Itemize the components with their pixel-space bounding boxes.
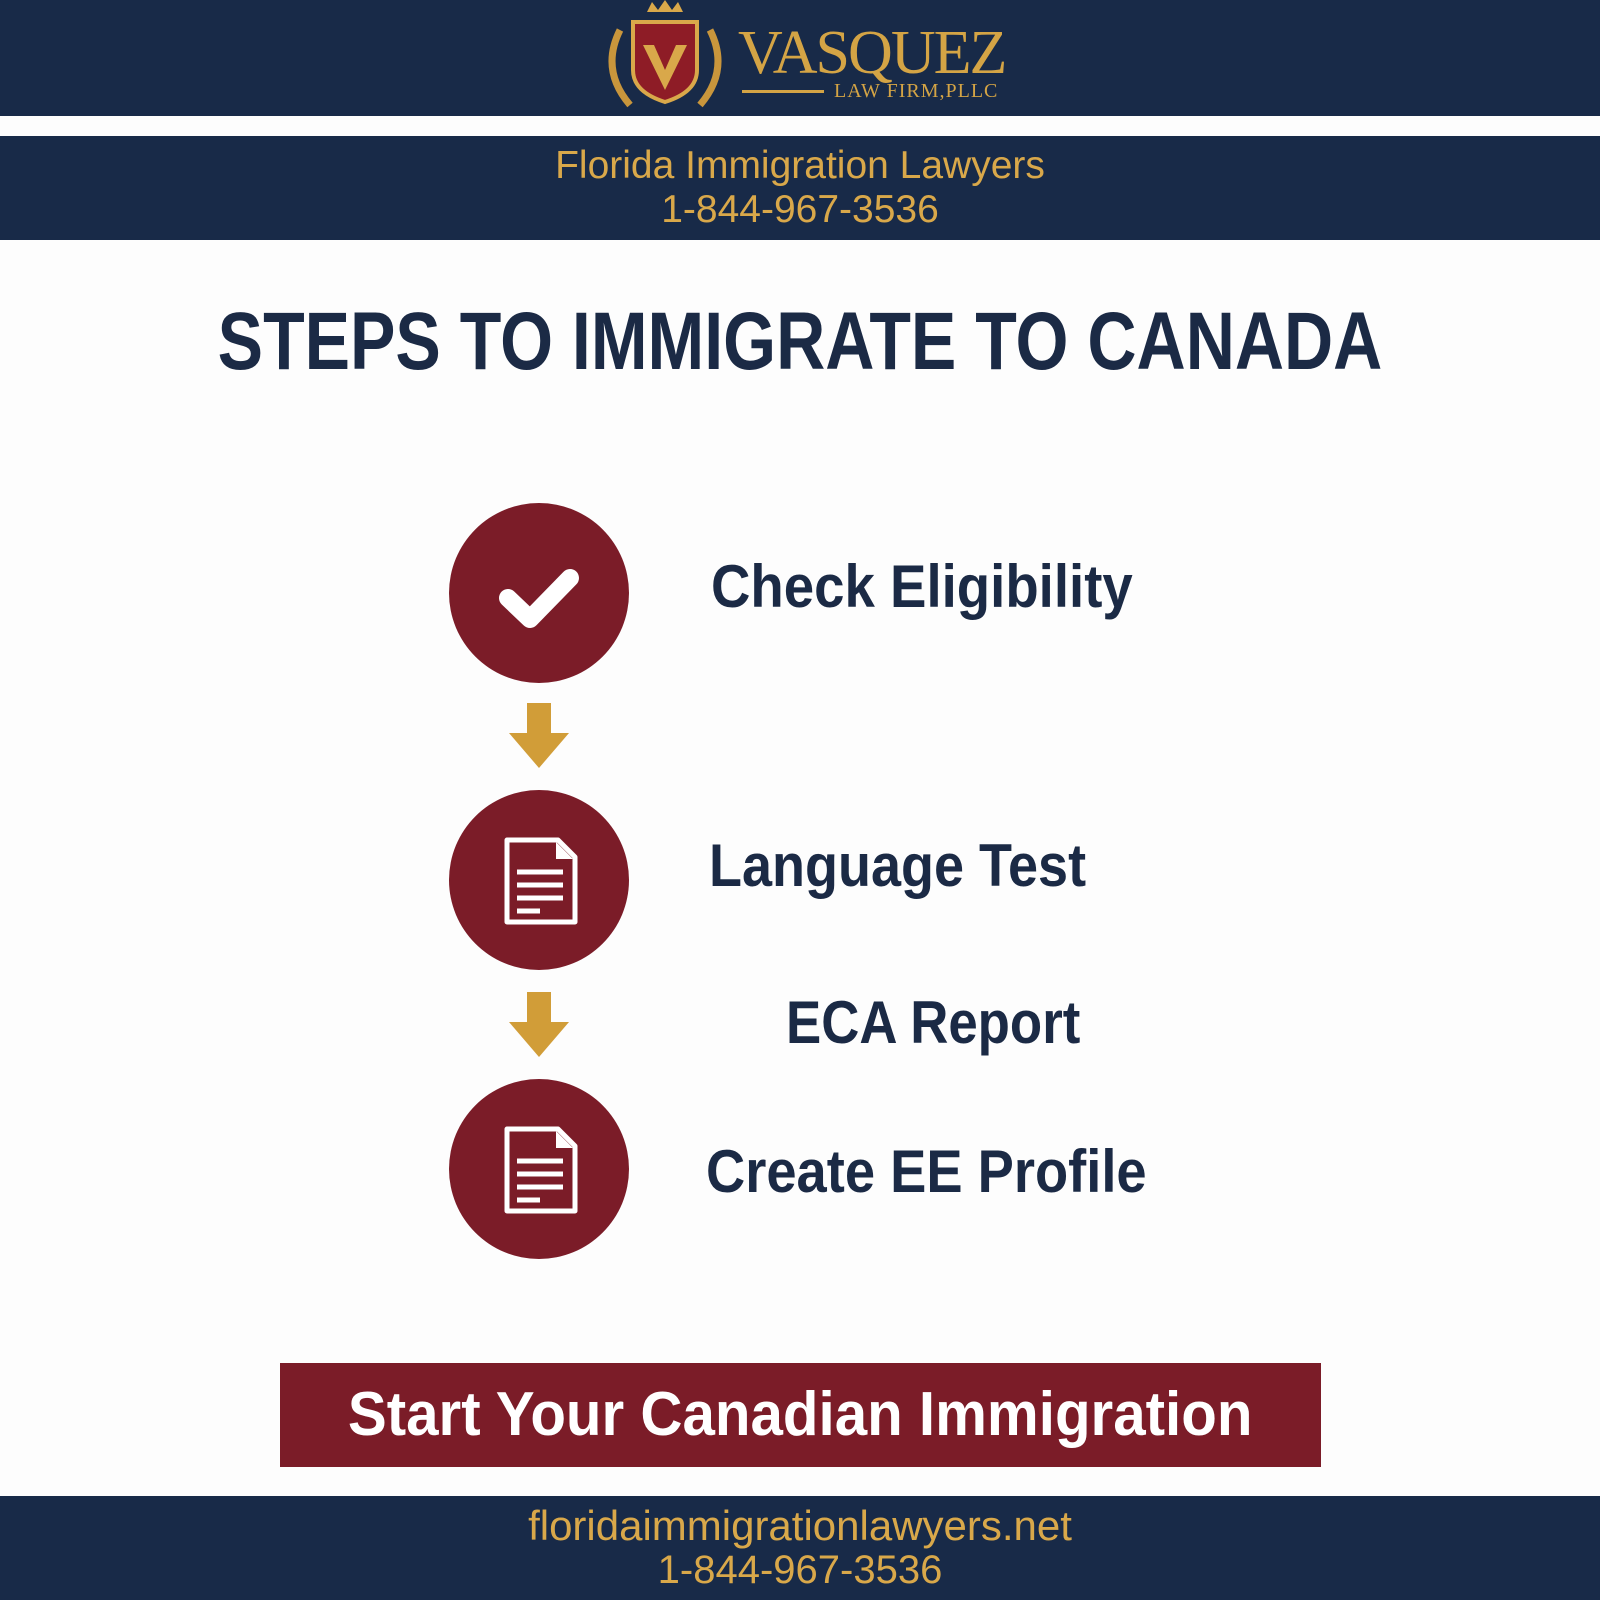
subheader band: Florida Immigration Lawyers bbox=[555, 144, 1045, 187]
arrow 1 bbox=[509, 703, 569, 768]
subheader band: 1-844-967-3536 bbox=[661, 188, 939, 231]
arrow 2 bbox=[509, 992, 569, 1057]
step label: Create EE Profile: Create EE Profile bbox=[706, 1138, 1147, 1205]
logo text: VASQUEZ bbox=[738, 19, 1005, 87]
step label: Check Eligibility: Check Eligibility bbox=[711, 553, 1133, 620]
step label: Language Test: Language Test bbox=[709, 832, 1086, 899]
CTA banner: Start Your Canadian Immigration bbox=[348, 1380, 1253, 1449]
footer band: 1-844-967-3536 bbox=[658, 1548, 942, 1592]
step label: ECA Report: ECA Report bbox=[786, 989, 1080, 1056]
footer band bbox=[0, 1496, 1600, 1600]
CTA banner bbox=[280, 1363, 1321, 1467]
footer band: floridaimmigrationlawyers.net bbox=[528, 1502, 1072, 1549]
icon: document circle 2 bbox=[449, 1079, 629, 1259]
logo emblem bbox=[608, 0, 722, 108]
icon: check circle bbox=[449, 503, 629, 683]
icon: document circle 1 bbox=[449, 790, 629, 970]
header band: logo bbox=[0, 0, 1600, 116]
title: STEPS TO IMMIGRATE TO CANADA bbox=[218, 296, 1382, 387]
subheader band bbox=[0, 136, 1600, 240]
header band: logo: LAW FIRM,PLLC bbox=[834, 80, 998, 102]
